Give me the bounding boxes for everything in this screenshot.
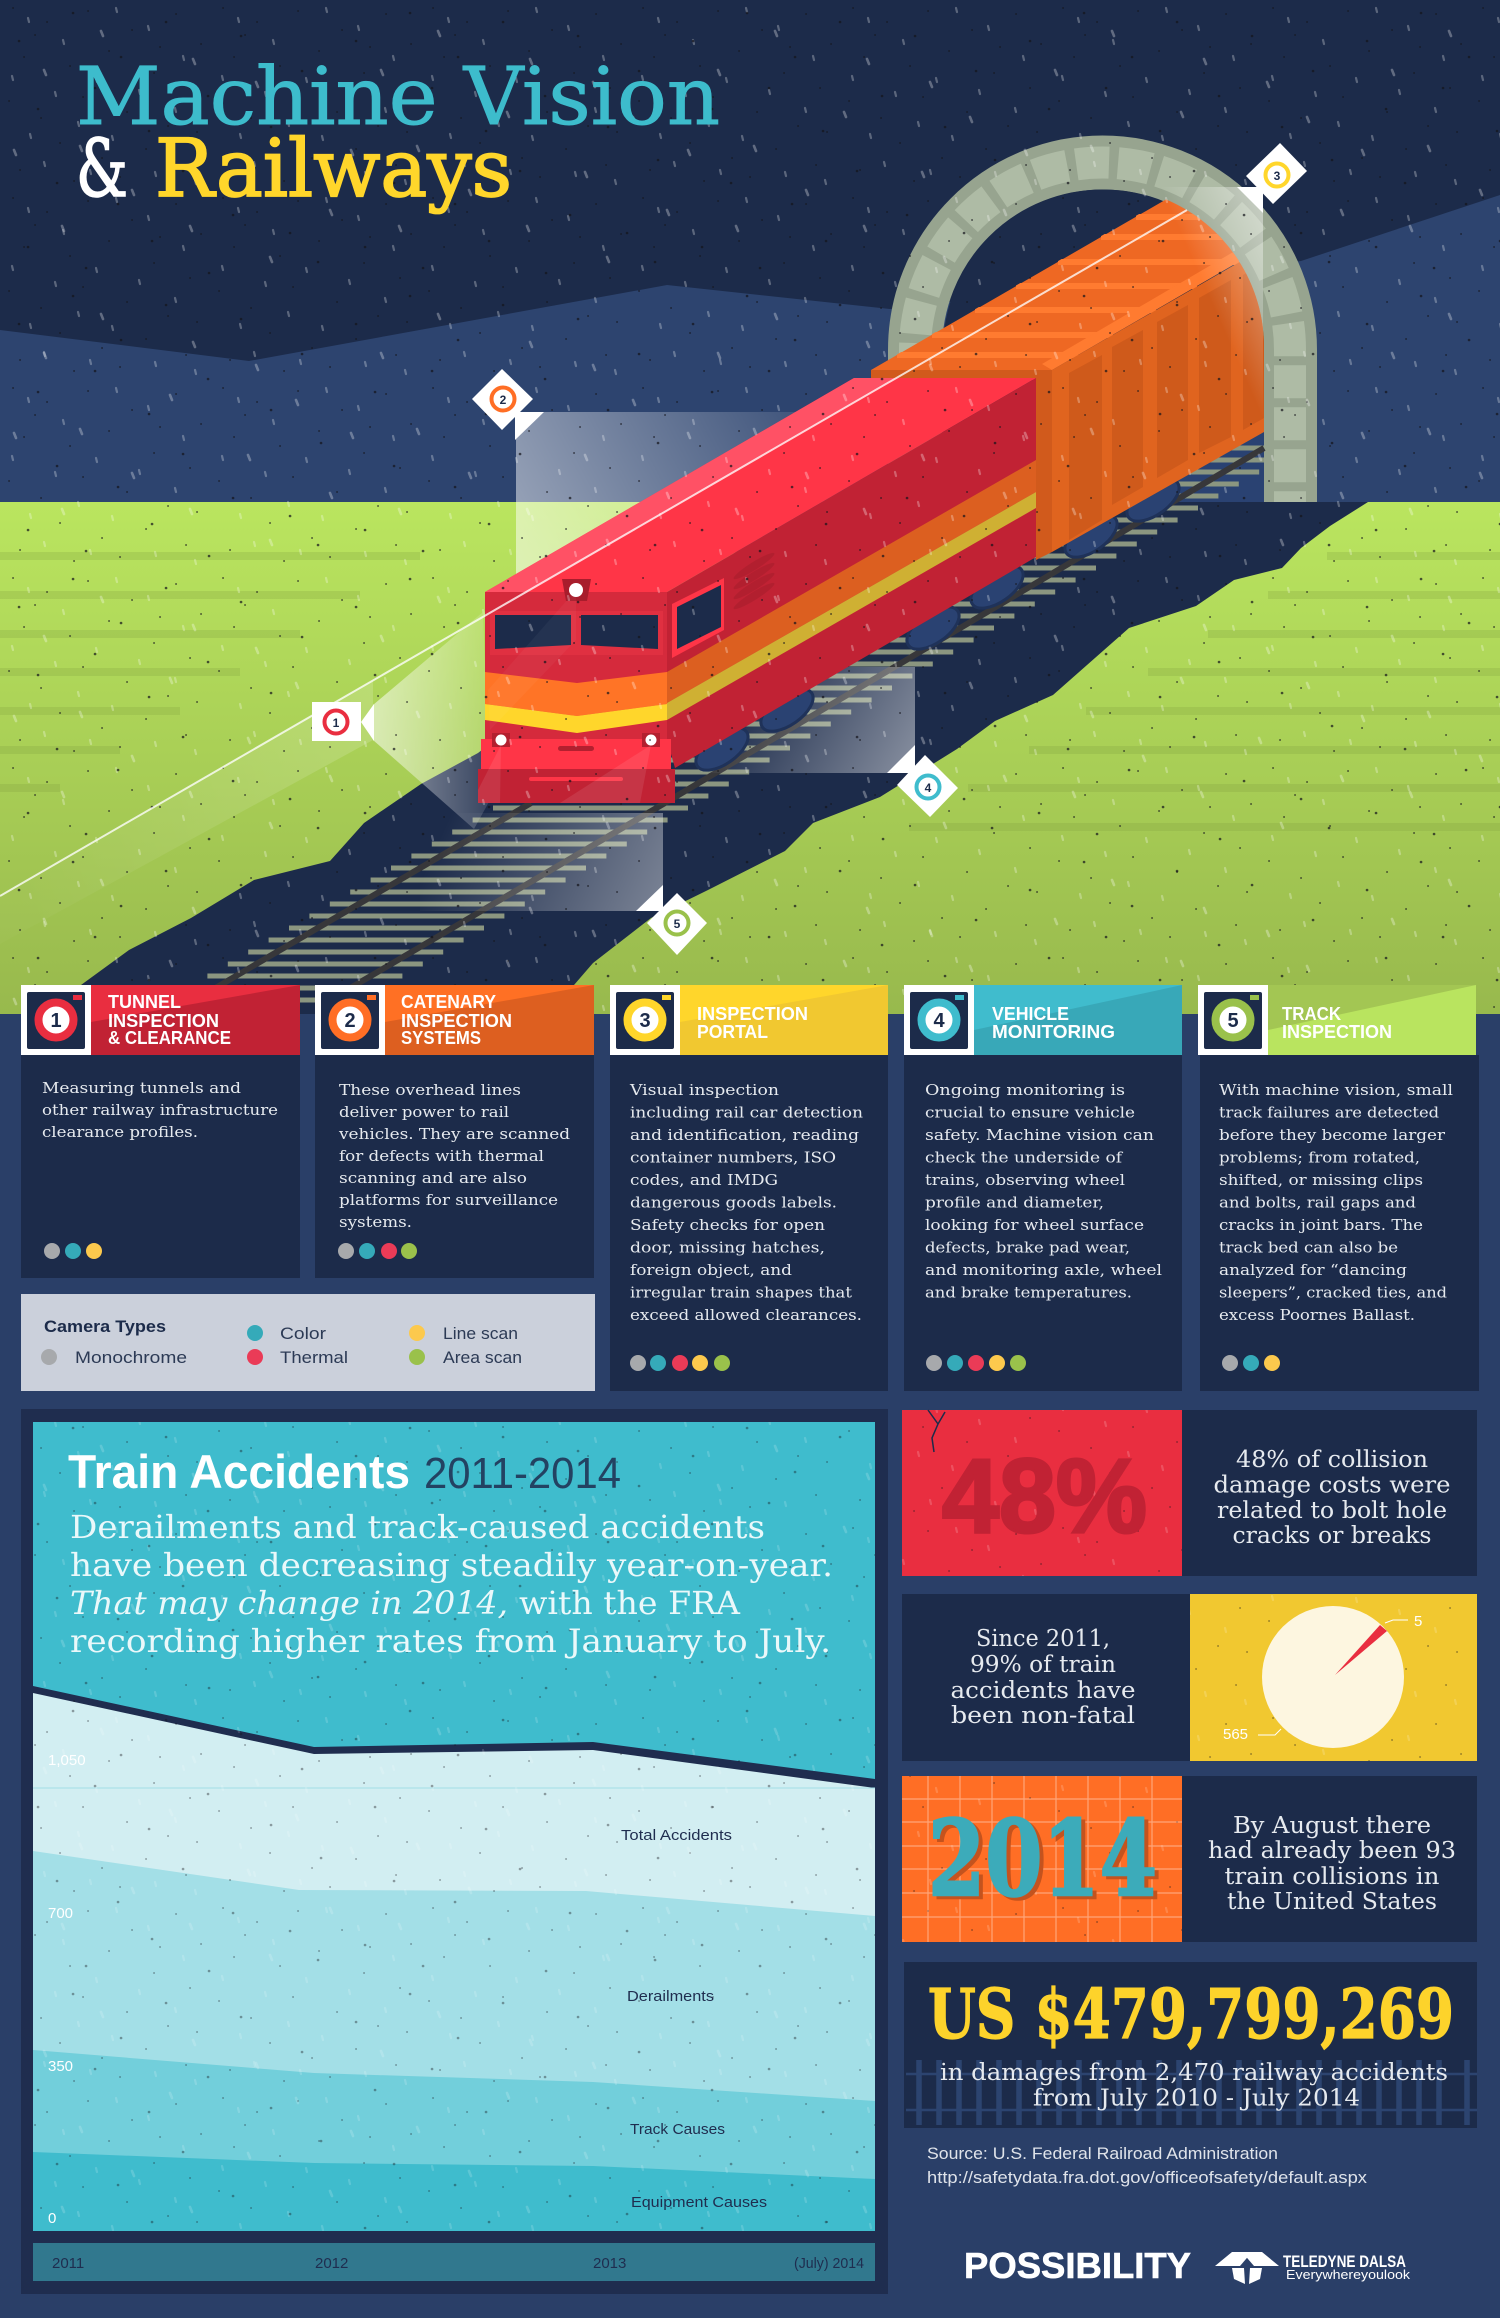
source note: http://safetydata.fra.dot.gov/officeofsafety/default.aspx	[927, 2169, 1368, 2187]
stat text: related to bolt hole	[1217, 1498, 1447, 1524]
body text: exceed allowed clearances.	[630, 1306, 862, 1324]
body text: clearance profiles.	[42, 1123, 198, 1141]
body text: codes, and IMDG	[630, 1171, 778, 1189]
stat: total damages: from July 2010 - July 2014	[1033, 2086, 1360, 2112]
x axis bar: (July) 2014	[794, 2255, 864, 2272]
pie chart: 565	[1223, 1726, 1248, 1743]
body text: platforms for surveillance	[339, 1191, 558, 1209]
chart title: Train Accidents	[68, 1445, 410, 1498]
camera marker 4	[887, 745, 958, 817]
legend: area scan: Area scan	[443, 1348, 522, 1367]
chart title: 2011-2014	[424, 1449, 621, 1498]
body text: sleepers”, cracked ties, and	[1219, 1284, 1447, 1302]
icon: camera 3	[610, 985, 680, 1055]
title	[76, 50, 720, 215]
camera type dots	[630, 1355, 730, 1371]
panel: camera types legend	[21, 1294, 595, 1391]
header: inspection portal	[680, 985, 888, 1055]
rails	[195, 448, 1264, 1000]
tunnel arch	[915, 162, 1290, 502]
chart description	[70, 1508, 833, 1660]
series labels: Track Causes	[630, 2121, 725, 2138]
series labels	[621, 1827, 767, 2211]
stat: 99 percent non-fatal: accidents have	[950, 1678, 1136, 1704]
loco side window	[672, 578, 724, 658]
track sleepers	[167, 448, 1300, 1000]
body text	[42, 1079, 278, 1141]
stat text: damage costs were	[1214, 1472, 1450, 1498]
body text: defects, brake pad wear,	[925, 1238, 1130, 1256]
roof headlight	[562, 579, 591, 601]
body text: door, missing hatches,	[630, 1238, 825, 1256]
legend: line scan	[409, 1324, 518, 1343]
camera type dots	[1222, 1355, 1280, 1371]
panel: track inspection	[1198, 985, 1479, 1391]
body text: for defects with thermal	[339, 1147, 544, 1165]
body text	[629, 1081, 863, 1324]
body text: and brake temperatures.	[925, 1284, 1132, 1302]
ground shadow around track	[60, 502, 1368, 1014]
header: inspection portal: INSPECTION	[697, 1004, 808, 1024]
series labels: Equipment Causes	[631, 2194, 767, 2211]
body text: cracks in joint bars. The	[1219, 1216, 1423, 1234]
body text: profile and diameter,	[925, 1194, 1104, 1212]
stat: 48 percent: 48%	[942, 1438, 1147, 1555]
title: &	[76, 122, 128, 215]
chart description: recording higher rates from January to July.	[70, 1622, 831, 1660]
header: vehicle monitoring: VEHICLE	[992, 1004, 1069, 1024]
stat: 2014 collisions	[902, 1776, 1477, 1942]
chart description: with the FRA	[519, 1584, 741, 1622]
body text: and monitoring axle, wheel	[925, 1261, 1162, 1279]
icon: camera 2	[315, 985, 385, 1055]
catenary wire	[0, 210, 1187, 896]
header: tunnel inspection	[91, 985, 300, 1055]
locomotive	[478, 378, 1036, 803]
source note	[927, 2145, 1368, 2187]
body text: before they become larger	[1219, 1126, 1446, 1144]
header: tunnel inspection: INSPECTION	[108, 1011, 219, 1031]
body text: These overhead lines	[339, 1081, 521, 1099]
chart title	[68, 1445, 621, 1498]
legend: monochrome: Monochrome	[75, 1348, 187, 1367]
header: catenary inspection: SYSTEMS	[401, 1028, 481, 1048]
distant hills	[0, 195, 1500, 510]
y axis labels: 350	[48, 2058, 73, 2075]
stat: 99 percent non-fatal: been non-fatal	[951, 1703, 1135, 1729]
body text: Safety checks for open	[630, 1216, 825, 1234]
panel: vehicle monitoring	[904, 985, 1182, 1391]
x axis bar: 2013	[593, 2255, 626, 2272]
panel: inspection portal	[610, 985, 888, 1391]
header: catenary inspection: CATENARY	[401, 992, 496, 1012]
body text: and identification, reading	[630, 1126, 859, 1144]
body text: excess Poornes Ballast.	[1219, 1306, 1415, 1324]
logo: teledyne dalsa: Everywhereyoulook	[1286, 2267, 1411, 2282]
logo: teledyne dalsa: TELEDYNE DALSA	[1283, 2252, 1406, 2271]
stat: 2014 collisions: train collisions in	[1224, 1864, 1440, 1890]
stacked area chart	[33, 1422, 875, 2231]
stat: 99 percent non-fatal	[902, 1594, 1477, 1761]
crack	[928, 1410, 945, 1452]
grass field	[0, 502, 1500, 1014]
camera marker 3: 3	[1274, 169, 1281, 183]
header: tunnel inspection: TUNNEL	[108, 992, 181, 1012]
body text: With machine vision, small	[1219, 1081, 1453, 1099]
panel: catenary inspection systems	[315, 985, 594, 1278]
stat: 2014 collisions: By August there	[1233, 1813, 1431, 1839]
bumper	[481, 739, 671, 769]
fence	[906, 2074, 1477, 2110]
body text: analyzed for “dancing	[1219, 1261, 1407, 1279]
body text: Measuring tunnels and	[42, 1079, 241, 1097]
pie chart	[1223, 1606, 1422, 1748]
lower page background	[0, 1014, 1500, 2318]
camera marker 2: 2	[500, 393, 507, 407]
camera marker 5: 5	[674, 917, 681, 931]
camera marker 2	[472, 369, 544, 440]
series labels: Derailments	[627, 1988, 714, 2005]
camera beam 3	[1160, 187, 1263, 420]
camera marker 4: 4	[925, 781, 932, 795]
header: catenary inspection: INSPECTION	[401, 1011, 512, 1031]
panel: train accidents chart	[21, 1409, 888, 2294]
header: vehicle monitoring	[974, 985, 1182, 1055]
body text: systems.	[339, 1213, 412, 1231]
y axis labels: 1,050	[48, 1752, 86, 1769]
body text: deliver power to rail	[339, 1103, 509, 1121]
stat: 99 percent non-fatal: 99% of train	[970, 1652, 1116, 1678]
stat: 2014 collisions: had already been 93	[1208, 1838, 1456, 1864]
camera beam 2	[516, 412, 860, 600]
body text: dangerous goods labels.	[630, 1194, 837, 1212]
legend: line scan: Line scan	[443, 1324, 518, 1343]
header: track inspection	[1268, 985, 1476, 1055]
icon: camera 2: 2	[344, 1010, 356, 1032]
sky	[0, 0, 1500, 520]
loco roof	[485, 378, 1036, 592]
chart description: have been decreasing steadily year-on-year.	[70, 1546, 833, 1584]
body text: foreign object, and	[630, 1261, 792, 1279]
x axis bar	[33, 2243, 875, 2281]
body text: check the underside of	[925, 1148, 1124, 1166]
stat: 2014 collisions: the United States	[1227, 1889, 1437, 1915]
stat text	[1214, 1447, 1450, 1549]
freight car body	[871, 200, 1264, 560]
body text: other railway infrastructure	[42, 1101, 278, 1119]
stat text: 48% of collision	[1236, 1447, 1428, 1473]
body text: track bed can also be	[1219, 1238, 1398, 1256]
logo: teledyne dalsa	[1215, 2252, 1411, 2284]
header: track inspection: INSPECTION	[1282, 1022, 1392, 1042]
stat: 2014 collisions: 2014	[932, 1800, 1161, 1923]
body text: Ongoing monitoring is	[925, 1081, 1125, 1099]
legend: monochrome	[41, 1348, 187, 1367]
body text	[338, 1081, 570, 1231]
stat: total damages	[904, 1962, 1477, 2128]
camera type dots	[44, 1243, 102, 1259]
chart description: Derailments and track-caused accidents	[70, 1508, 765, 1546]
camera marker 5	[636, 885, 707, 955]
x axis bar: 2011	[52, 2255, 84, 2272]
panel: tunnel inspection and clearance	[21, 985, 300, 1278]
slogan: possibility: POSSIBILITY	[964, 2245, 1191, 2286]
stat: 48 percent	[902, 1410, 1477, 1576]
body text: irregular train shapes that	[630, 1284, 852, 1302]
icon: camera 5: 5	[1227, 1010, 1239, 1032]
body text: trains, observing wheel	[925, 1171, 1125, 1189]
legend: thermal	[247, 1348, 348, 1367]
loco vents	[732, 550, 776, 612]
body text: track failures are detected	[1219, 1104, 1439, 1122]
body text: Visual inspection	[629, 1081, 779, 1099]
pie chart: 5	[1414, 1613, 1422, 1630]
icon: camera 5	[1198, 985, 1268, 1055]
legend: thermal: Thermal	[280, 1348, 348, 1367]
hero scene: night landscape with train	[0, 0, 1500, 1014]
camera beam 1	[373, 612, 490, 829]
y axis labels: 0	[48, 2210, 56, 2227]
body text	[925, 1081, 1162, 1302]
icon: camera 1	[21, 985, 91, 1055]
body text: problems; from rotated,	[1219, 1148, 1420, 1166]
stat: 99 percent non-fatal: Since 2011,	[976, 1626, 1110, 1652]
icon: camera 4: 4	[933, 1010, 945, 1032]
body text: looking for wheel surface	[925, 1216, 1144, 1234]
camera beam 5	[420, 813, 663, 911]
body text	[1219, 1081, 1453, 1324]
x axis bar: 2012	[315, 2255, 348, 2272]
stat: total damages: in damages from 2,470 railway accidents	[940, 2060, 1448, 2086]
icon: camera 1: 1	[50, 1010, 62, 1032]
title: Machine Vision	[76, 50, 720, 143]
icon: camera 3: 3	[639, 1010, 651, 1032]
body text: shifted, or missing clips	[1219, 1171, 1423, 1189]
header: track inspection: TRACK	[1282, 1004, 1341, 1024]
body text: including rail car detection	[630, 1104, 863, 1122]
body text: crucial to ensure vehicle	[925, 1104, 1135, 1122]
camera marker 1	[312, 702, 374, 741]
camera marker 1: 1	[333, 716, 340, 730]
body text: vehicles. They are scanned	[338, 1125, 570, 1143]
header: inspection portal: PORTAL	[697, 1022, 768, 1042]
camera beam 4	[700, 667, 915, 773]
header: vehicle monitoring: MONITORING	[992, 1022, 1115, 1042]
loco front	[485, 592, 667, 745]
y axis labels	[48, 1752, 86, 2227]
legend: color	[247, 1324, 326, 1343]
stat text: cracks or breaks	[1232, 1523, 1432, 1549]
header: tunnel inspection: & CLEARANCE	[108, 1028, 231, 1048]
panel: camera types legend: Camera Types	[44, 1317, 166, 1336]
chart description: That may change in 2014,	[70, 1584, 508, 1622]
wheels	[689, 471, 1186, 778]
loco side	[667, 378, 1036, 768]
stat: 2014 collisions: 2014	[928, 1797, 1157, 1920]
series labels: Total Accidents	[621, 1827, 732, 1844]
speckle texture	[0, 0, 1500, 1014]
source note: Source: U.S. Federal Railroad Administration	[927, 2145, 1278, 2163]
camera type dots	[926, 1355, 1026, 1371]
title: Railways	[155, 122, 512, 215]
camera type dots	[338, 1243, 417, 1259]
body text: safety. Machine vision can	[925, 1126, 1154, 1144]
body text: scanning and are also	[339, 1169, 527, 1187]
legend: color: Color	[280, 1324, 326, 1343]
body text: and bolts, rail gaps and	[1219, 1194, 1416, 1212]
legend: area scan	[409, 1348, 522, 1367]
header: catenary inspection	[385, 985, 594, 1055]
body text: container numbers, ISO	[630, 1148, 836, 1166]
y axis labels: 700	[48, 1905, 73, 1922]
camera marker 3	[1237, 143, 1307, 213]
icon: camera 4	[904, 985, 974, 1055]
